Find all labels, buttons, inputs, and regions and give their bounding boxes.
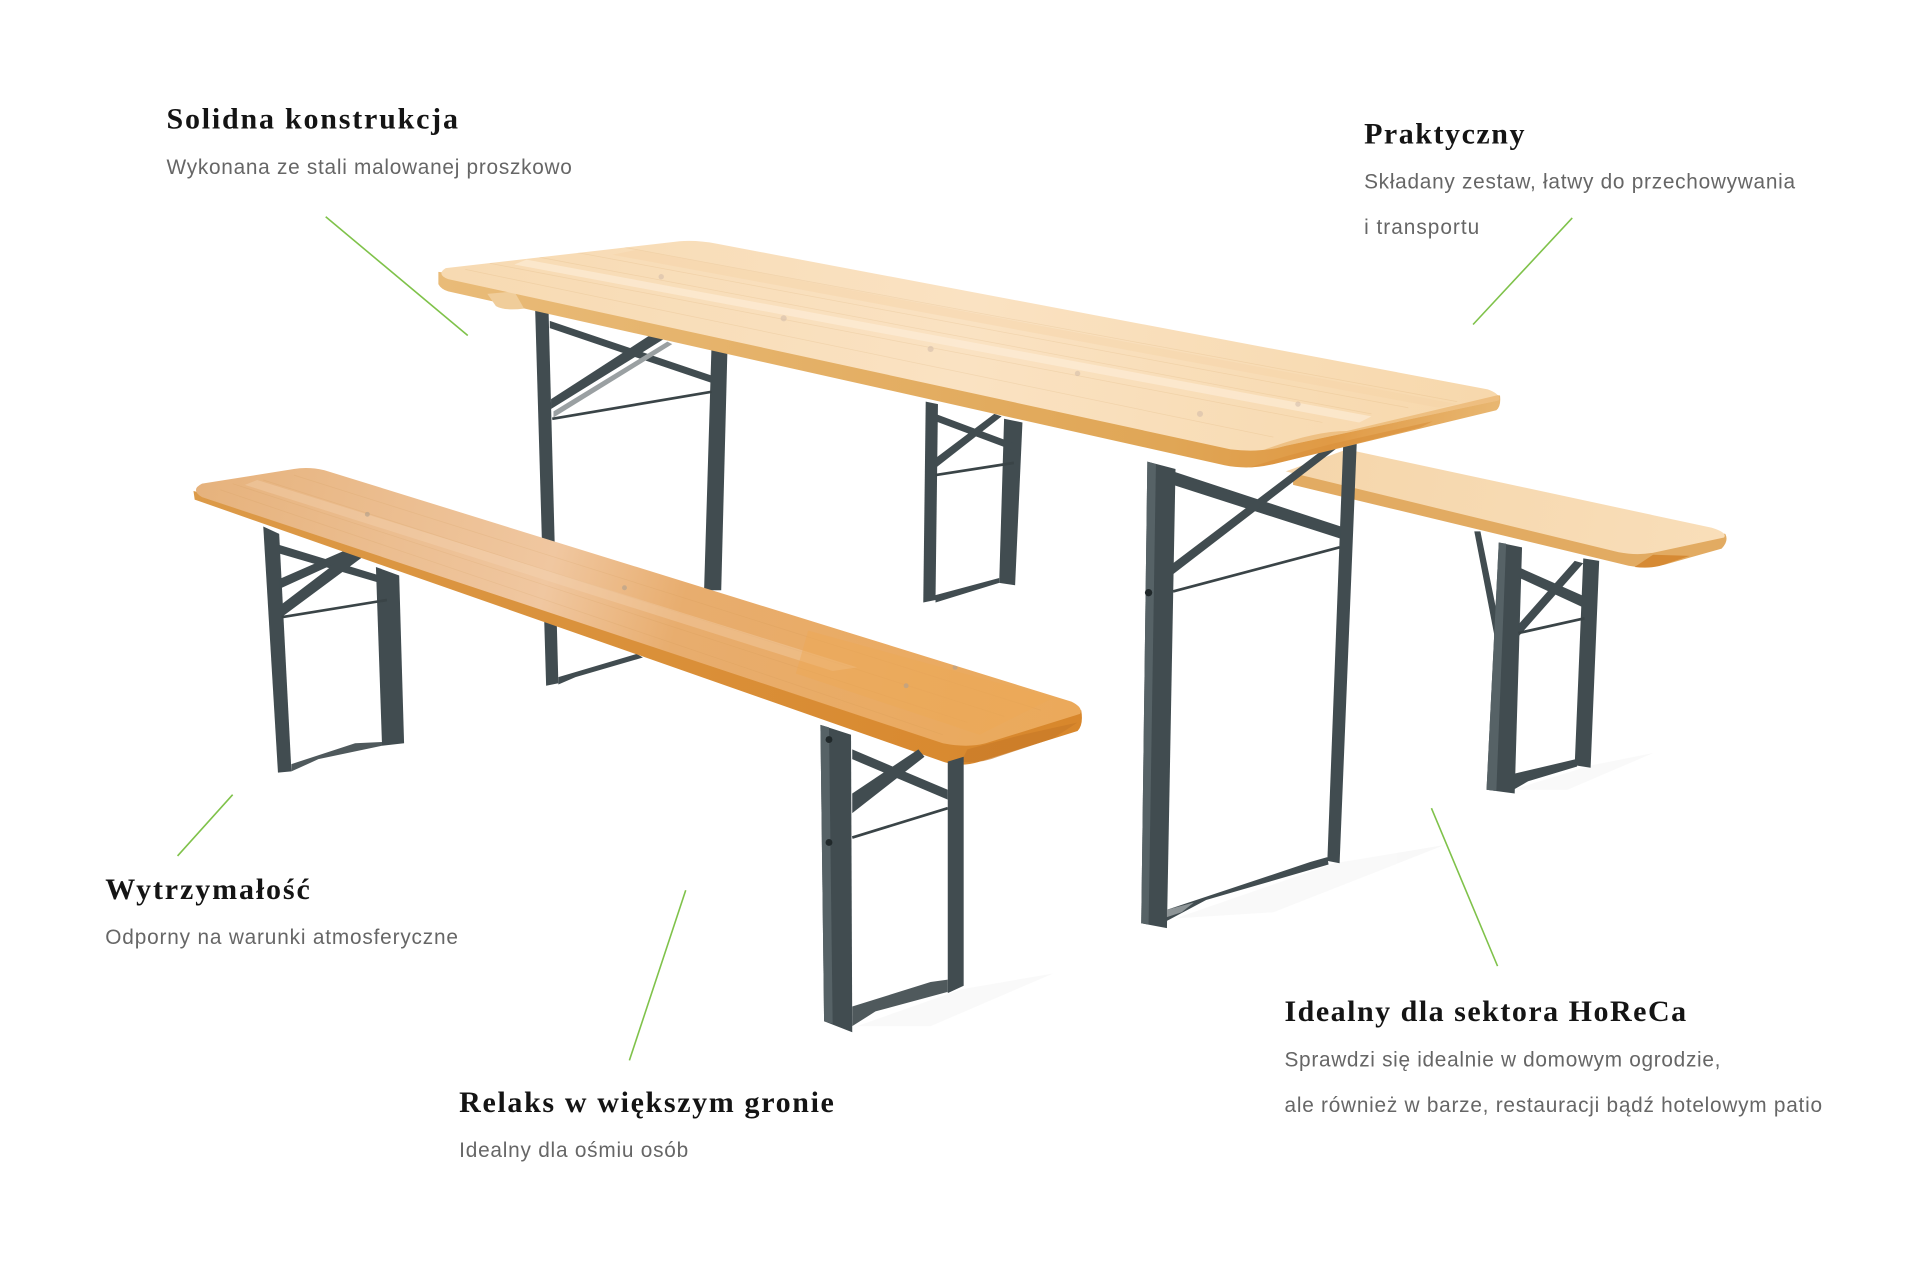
callout: Idealny dla sektora HoReCa <box>1284 808 1822 1117</box>
callout: Praktyczny <box>1364 117 1796 324</box>
table top <box>438 241 1501 468</box>
right bench <box>1286 449 1727 793</box>
callout: Solidna konstrukcja: Wykonana ze stali malowanej proszkowo <box>167 156 572 179</box>
table far frame <box>923 402 1022 602</box>
callout: Wytrzymałość <box>105 795 458 949</box>
front bench right frame <box>820 725 964 1032</box>
callout: Wytrzymałość: Odporny na warunki atmosferyczne <box>105 926 458 949</box>
infographic canvas <box>106 108 1822 1162</box>
callout: Idealny dla sektora HoReCa: ale również w barze, restauracji bądź hotelowym patio <box>1284 1094 1822 1117</box>
callout: Idealny dla sektora HoReCa: Idealny dla sektora HoReCa <box>1284 995 1686 1028</box>
callout: Wytrzymałość: Wytrzymałość <box>105 873 310 906</box>
callout: Relaks w większym gronie: Relaks w większym gronie <box>459 1086 834 1119</box>
callout: Relaks w większym gronie <box>459 890 834 1162</box>
table back frame <box>535 307 727 686</box>
front bench left frame <box>263 527 404 773</box>
callout: Solidna konstrukcja: Solidna konstrukcja <box>167 103 458 136</box>
callout: Praktyczny: Składany zestaw, łatwy do przechowywania <box>1364 171 1796 194</box>
callout: Solidna konstrukcja <box>167 103 572 336</box>
floor shadows <box>857 753 1653 1026</box>
table near frame <box>1141 443 1357 928</box>
photo: folding table and benches <box>193 241 1727 1032</box>
right bench top <box>1286 449 1727 568</box>
wood grain <box>465 247 1501 456</box>
wood grain <box>236 475 958 710</box>
right bench frame <box>1474 531 1599 793</box>
callout: Idealny dla sektora HoReCa: Sprawdzi się idealnie w domowym ogrodzie, <box>1284 1049 1720 1072</box>
callout: Praktyczny: Praktyczny <box>1364 117 1524 150</box>
callout: Praktyczny: i transportu <box>1364 216 1479 239</box>
front bench top <box>193 468 1082 765</box>
callout: Relaks w większym gronie: Idealny dla ośmiu osób <box>459 1139 688 1162</box>
